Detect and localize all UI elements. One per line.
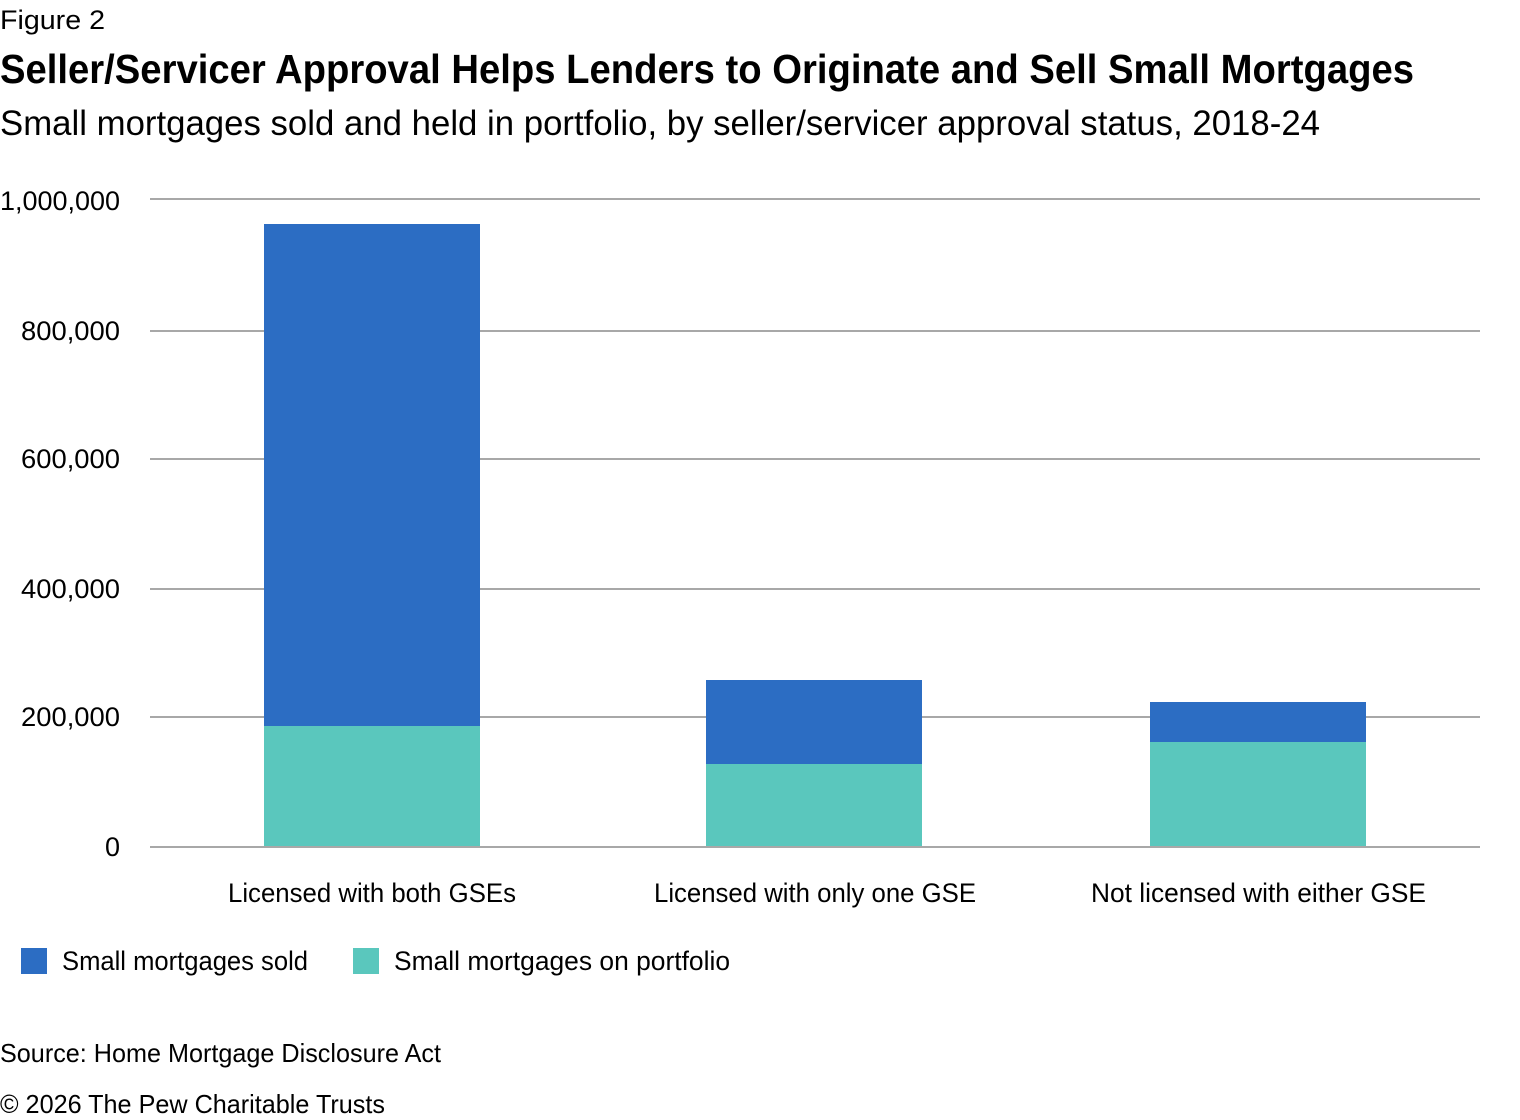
x-axis labels — [228, 878, 1426, 908]
figure label: Figure 2 — [0, 5, 105, 35]
y-axis labels: 0 — [105, 832, 120, 862]
subtitle: Small mortgages sold and held in portfolio, by seller/servicer approval status, 2018-24 — [0, 104, 1320, 143]
y-axis labels — [0, 186, 120, 862]
title: Seller/Servicer Approval Helps Lenders to Originate and Sell Small Mortgages — [0, 46, 1414, 92]
x-axis labels: Licensed with only one GSE — [654, 878, 976, 908]
bar: not licensed with either GSE — [1150, 702, 1366, 846]
y-axis labels: 1,000,000 — [0, 186, 120, 216]
bar: licensed with only one GSE — [706, 680, 922, 846]
stacked bar chart — [0, 186, 1480, 908]
x-axis labels: Licensed with both GSEs — [228, 878, 516, 908]
x-axis labels: Not licensed with either GSE — [1091, 878, 1426, 908]
legend — [21, 946, 730, 976]
legend: Small mortgages sold — [62, 946, 308, 976]
bar: licensed with both GSEs — [264, 224, 480, 846]
copyright: © 2026 The Pew Charitable Trusts — [0, 1089, 385, 1119]
legend: Small mortgages on portfolio — [394, 946, 730, 976]
y-axis labels: 200,000 — [21, 702, 120, 732]
source note: Source: Home Mortgage Disclosure Act — [0, 1038, 442, 1068]
y-axis labels: 600,000 — [21, 444, 120, 474]
y-axis labels: 400,000 — [21, 574, 120, 604]
y-axis labels: 800,000 — [21, 316, 120, 346]
